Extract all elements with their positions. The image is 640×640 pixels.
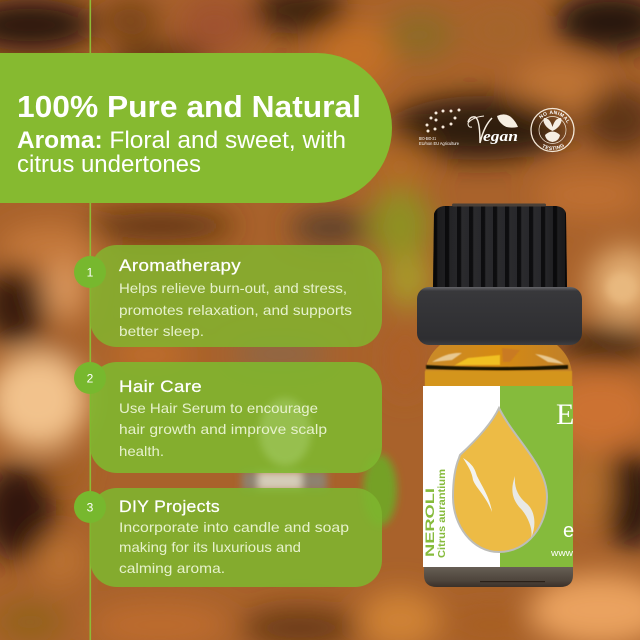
- card body text: Use Hair Serum to encourage: [119, 400, 318, 416]
- label text: Citrus aurantium: Citrus aurantium: [437, 469, 448, 558]
- card body text: making for its luxurious and: [119, 539, 301, 555]
- number badge 2: 2: [87, 372, 94, 386]
- icon: Vegan script logo: egan: [483, 129, 518, 145]
- text: aroma line two: citrus undertones: [17, 151, 201, 178]
- card body text: [119, 280, 352, 339]
- card body text: promotes relaxation, and supports: [119, 302, 352, 318]
- card 2: Hair Care: [74, 362, 382, 473]
- card body text: [119, 519, 349, 576]
- brand text on label: www: [550, 548, 574, 558]
- number badge 2: [74, 362, 106, 394]
- card body text: hair growth and improve scalp: [119, 421, 327, 437]
- icon: no animal testing badge: TESTING: [542, 144, 564, 150]
- panel: header banner: [0, 53, 392, 203]
- label: green side: [500, 386, 573, 567]
- text: aroma line one: Aroma: Floral and sweet, with: [17, 127, 346, 154]
- brand text on label: E: [556, 398, 574, 431]
- number badge 3: 3: [87, 500, 94, 514]
- card heading: Hair Care: [119, 377, 202, 396]
- certification logos: [419, 108, 575, 152]
- card body text: better sleep.: [119, 323, 204, 339]
- icon: EU organic leaf: EU/non EU Agriculture: [419, 141, 460, 146]
- bottle glass neck: [425, 345, 572, 392]
- brand text on label: [550, 398, 574, 558]
- icon: EU organic leaf: BIO-BIO-21: [419, 136, 437, 141]
- card heading: Aromatherapy: [119, 256, 241, 275]
- card body text: health.: [119, 443, 164, 459]
- card body text: [119, 400, 327, 459]
- card heading: DIY Projects: [119, 497, 220, 516]
- bottle cap: collar: [417, 287, 582, 345]
- heading: 100% Pure and Natural: 100% Pure and Natural: [17, 90, 361, 124]
- card body text: Incorporate into candle and soap: [119, 519, 349, 535]
- brand text on label: e: [563, 520, 574, 542]
- product: essential oil bottle: [417, 204, 582, 587]
- number badge 3: [74, 491, 106, 523]
- label text: NEROLI: NEROLI: [425, 488, 437, 557]
- icon: no animal testing badge: [530, 108, 575, 152]
- card 3: DIY Projects: [74, 488, 382, 587]
- icon: Vegan script logo: [468, 114, 518, 145]
- number badge 1: [74, 256, 106, 288]
- icon: oil drop: [453, 408, 547, 552]
- card body text: calming aroma.: [119, 560, 225, 576]
- bottle base: [424, 565, 573, 587]
- number badge 1: 1: [87, 266, 94, 280]
- icon: EU organic leaf: [419, 108, 460, 146]
- icon: no animal testing badge: NO ANIMAL: [538, 110, 570, 124]
- bottle cap: ribbed top: [433, 204, 567, 287]
- label: white side: [423, 386, 500, 567]
- card 1: Aromatherapy: [74, 245, 382, 347]
- vertical timeline line: [90, 0, 91, 640]
- card body text: Helps relieve burn-out, and stress,: [119, 280, 347, 296]
